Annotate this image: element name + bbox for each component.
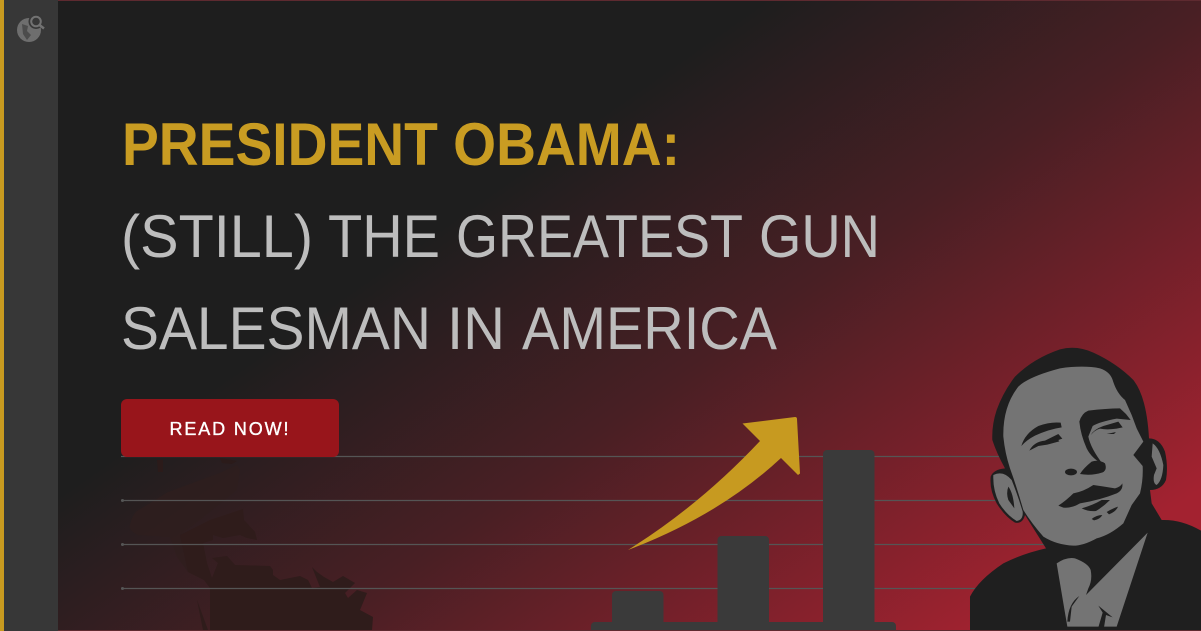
title line 3: IN bbox=[447, 295, 505, 362]
title line 3 bbox=[121, 295, 777, 362]
lower lip bbox=[1082, 500, 1110, 511]
shirt collar bbox=[1057, 533, 1148, 627]
right ear bbox=[1152, 443, 1163, 485]
sidebar bbox=[0, 0, 58, 631]
portrait of President Obama bbox=[970, 348, 1201, 630]
left eye bbox=[1029, 434, 1062, 451]
button: read now: READ NOW! bbox=[170, 419, 288, 439]
chin marks bbox=[1092, 507, 1118, 520]
chart grid lines bbox=[121, 456, 1060, 590]
right eye bbox=[1091, 422, 1123, 435]
sidebar gold accent bbox=[0, 0, 4, 631]
title line 1: PRESIDENT OBAMA: bbox=[122, 111, 680, 178]
nostril bbox=[1065, 469, 1077, 475]
button: read now bbox=[121, 399, 339, 457]
nose bbox=[1080, 461, 1106, 475]
title line 2: (STILL) bbox=[121, 203, 313, 270]
title line 3: SALESMAN bbox=[121, 295, 431, 362]
title line 2: GREATEST bbox=[456, 203, 743, 270]
title line 3: AMERICA bbox=[522, 295, 777, 362]
arrow: rising trend bbox=[628, 417, 800, 550]
right eyebrow and nose side bbox=[1079, 408, 1131, 464]
left eyebrow bbox=[1021, 422, 1062, 446]
ghost silhouette bbox=[130, 458, 373, 630]
title line 2: THE bbox=[328, 203, 440, 270]
face bbox=[1003, 367, 1143, 546]
title line 2 bbox=[121, 203, 880, 270]
bar chart bbox=[591, 450, 896, 631]
left ear bbox=[993, 473, 1023, 521]
head and suit silhouette bbox=[970, 348, 1201, 630]
icon: globe with magnifier bbox=[17, 14, 44, 42]
tie lines bbox=[1067, 596, 1113, 627]
title bbox=[121, 111, 880, 362]
mouth bbox=[1058, 483, 1122, 508]
title line 2: GUN bbox=[759, 203, 880, 270]
